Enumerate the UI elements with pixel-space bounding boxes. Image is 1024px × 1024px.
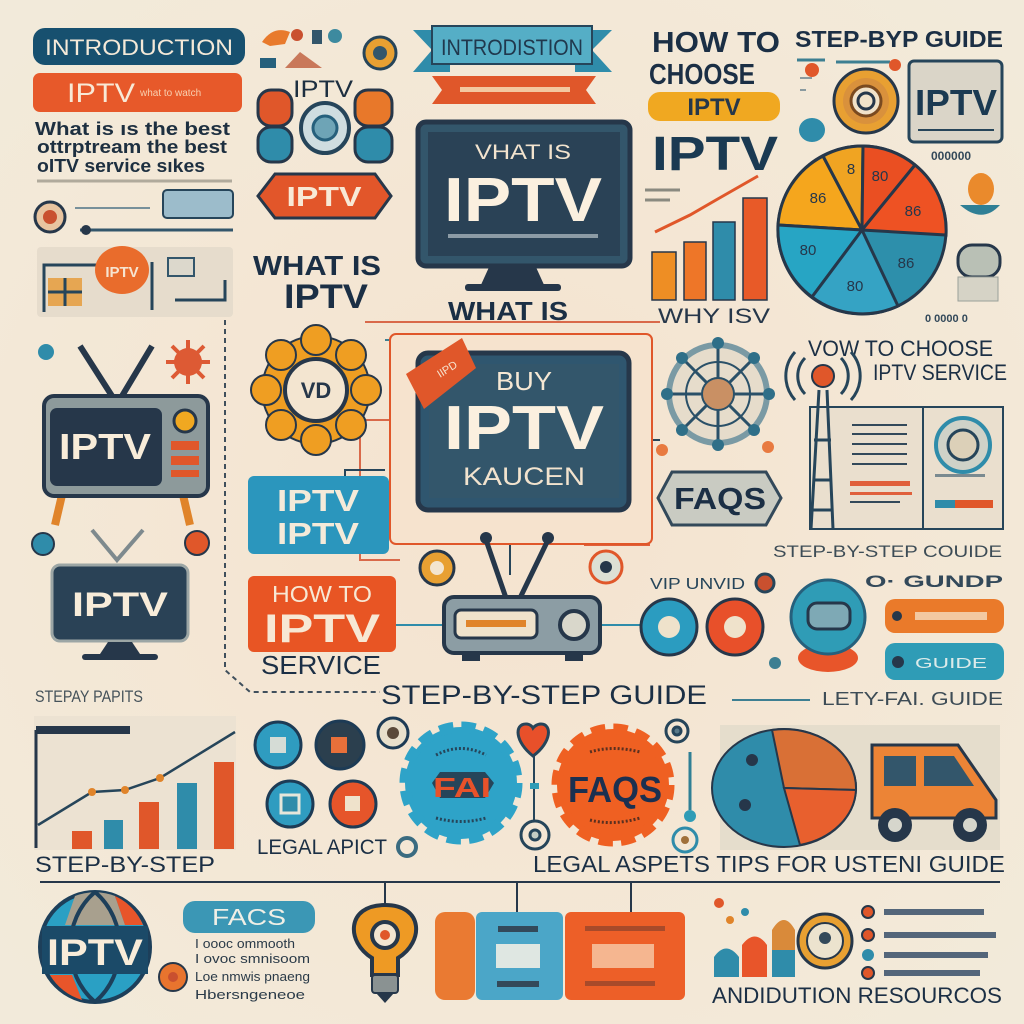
main TV buy IPTV [390,334,652,544]
retro TV with antenna [44,346,208,525]
intro question text: oITV service sıkes [37,156,205,176]
FAQs button: FAQS [674,481,766,516]
small decorative icons [260,29,396,69]
panel: center [248,325,707,710]
panel: top center what is IPTV [413,26,630,326]
ribbon heading [413,26,612,72]
label: why is: WHY ISV [658,305,770,328]
sunflower icon [251,325,381,455]
yellow IPTV tag: IPTV [687,94,741,121]
label: legal aspect: LEGAL APICT [257,836,387,859]
orange how to IPTV card: HOW TO [272,581,372,607]
connector lines [40,320,1000,912]
IPTV monitor [909,61,1002,142]
orange IPTV banner [33,73,242,112]
pie chart: 80 [800,242,816,259]
small text: O· GUNDP [865,572,1003,591]
blue IPTV card: IPTV [277,483,359,518]
heading: step guide: STEP-BYP GUIDE [795,26,1003,52]
bullet list right [862,906,996,979]
teal button: GUIDE [915,655,987,672]
heart icon [518,724,548,820]
flat screen TV [52,530,188,660]
small labels and icons [925,149,1000,325]
heading: how to choose: CHOOSE [649,59,755,91]
retro TV with antenna: IPTV [59,426,151,467]
webcam icon [769,580,865,672]
panel: IPTV icon column [253,29,396,316]
heading: how to choose [649,27,780,91]
bar chart with trend [34,716,236,850]
orange card [565,912,685,1000]
heading: how to choose: HOW TO [652,27,780,59]
intro question text: ottrptream the best [37,137,227,157]
blue burst badge [405,727,517,839]
label: what is: WHAT IS [448,296,568,326]
target icon [834,69,898,133]
target circle [798,914,852,968]
pie chart: 86 [810,190,826,207]
large TV: IPTV [444,166,602,235]
buttons and circle icons: VIP UNVID [650,576,745,593]
FAQs tag and bullet list: I oooc ommooth [195,936,295,951]
small icons row [35,181,233,235]
FAQs tag and bullet list [159,901,315,1002]
intro question text [35,119,230,176]
panel: introduction top left [33,28,245,317]
buttons and circle icons [641,574,774,655]
orange IPTV banner: IPTV [67,78,135,108]
heading: what is IPTV [253,250,381,316]
pie chart [778,146,946,314]
panel: legal icons [255,718,416,859]
pie chart: 80 [847,278,863,295]
main TV buy IPTV: IIPD [435,359,460,381]
small pins [521,720,697,852]
broadcast tower [786,352,860,529]
panel: how to choose [645,27,780,328]
panel: bottom left chart [34,716,236,877]
orange burst badge FAQs: FAQS [568,769,662,810]
label: step-by-step: STEP-BY-STEP [35,852,215,877]
camera emblem: IPTV [293,76,353,103]
camera emblem [258,76,392,162]
pie chart: 86 [898,255,914,272]
yellow IPTV tag [648,92,780,121]
orange how to IPTV card: IPTV [264,607,380,651]
pie chart [712,729,856,847]
panel: bottom row [40,892,1002,1008]
network wheel icon [656,337,775,456]
panel: step-by-step top right [778,26,1003,325]
small labels and icons: 0 0000 0 [925,313,968,325]
sunflower icon: VD [301,378,331,403]
mini bar chart [714,898,795,977]
orange van [872,745,996,842]
bar chart with trend arrow [645,176,767,300]
large TV: VHAT IS [475,141,571,164]
FAQs tag and bullet list: Hbersngeneoe [195,987,305,1002]
heading: how to choose IPTV service: VOW TO CHOOSE [808,336,993,361]
main TV buy IPTV: KAUCEN [463,463,585,491]
heading: how to choose IPTV service: IPTV SERVICE [873,360,1007,385]
orange IPTV badge [258,174,391,218]
four circle icons [255,718,408,827]
panel: FAQs badges [405,720,1005,877]
IPTV big label: IPTV [652,128,778,181]
orange how to IPTV card [248,576,396,652]
side bullets [32,344,209,555]
document panel [810,407,1003,529]
globe IPTV [40,892,150,1002]
TV network diagram [37,246,233,317]
sun icon [166,340,210,384]
orange sub ribbon [432,76,596,104]
intro question text: What is ıs the best [35,119,230,139]
orange IPTV banner: what to watch [139,88,201,99]
circle nodes near router [420,551,622,585]
FAQs button [658,472,781,525]
label: step parts: STEPAY PAPITS [35,687,143,706]
TV network diagram: IPTV [105,264,139,281]
panel: right middle [641,336,1007,709]
heading: what is IPTV: WHAT IS [253,250,381,281]
pie chart: 8 [847,161,855,178]
orange IPTV badge: IPTV [286,181,362,212]
main TV buy IPTV: BUY [496,366,552,396]
blue IPTV card [248,476,389,554]
orange burst badge FAQs [557,729,669,841]
label: guide small right: LETY-FAI. GUIDE [822,689,1003,709]
light bulb icon [354,905,416,1003]
IPTV monitor: IPTV [915,82,997,123]
teal button [885,643,1004,680]
flat screen TV: IPTV [72,586,168,624]
heading: what is IPTV: IPTV [284,278,368,316]
panel: pie and van [712,725,1000,850]
label: service: SERVICE [261,650,381,680]
pie chart: 80 [872,168,888,185]
orange button [885,599,1004,633]
label: addition resources: ANDIDUTION RESOURCOS [712,983,1002,1008]
heading: introduction [33,28,245,65]
label: step-by-step guide small: STEP-BY-STEP COUIDE [773,542,1002,561]
FAQs tag and bullet list: I ovoc smnisoom [195,951,310,966]
small blobs [797,59,901,142]
orange side card [435,912,475,1000]
FAQs tag and bullet list: Loe nmwis pnaeng [195,969,310,984]
label: legal aspects tips: LEGAL ASPETS TIPS FOR USTENI GUIDE [533,851,1005,877]
pie chart: 86 [905,203,921,220]
router with antennas [444,532,600,661]
shaded backdrop [720,725,1000,850]
ribbon heading: INTRODISTION [441,35,583,60]
heading: how to choose IPTV service [808,336,1007,385]
small labels and icons: 000000 [931,149,971,163]
heading: introduction: INTRODUCTION [45,35,233,60]
main TV buy IPTV: IPTV [444,394,604,463]
blue burst badge: FAI [433,772,491,803]
FAQs tag and bullet list: FACS [212,904,286,930]
blue IPTV card: IPTV [277,516,359,551]
heading: step-by-step guide: STEP-BY-STEP GUIDE [381,680,707,710]
blue card [476,912,563,1000]
globe IPTV: IPTV [47,932,143,973]
large TV [418,122,630,291]
panel: IPTV retro TV left [32,340,210,706]
